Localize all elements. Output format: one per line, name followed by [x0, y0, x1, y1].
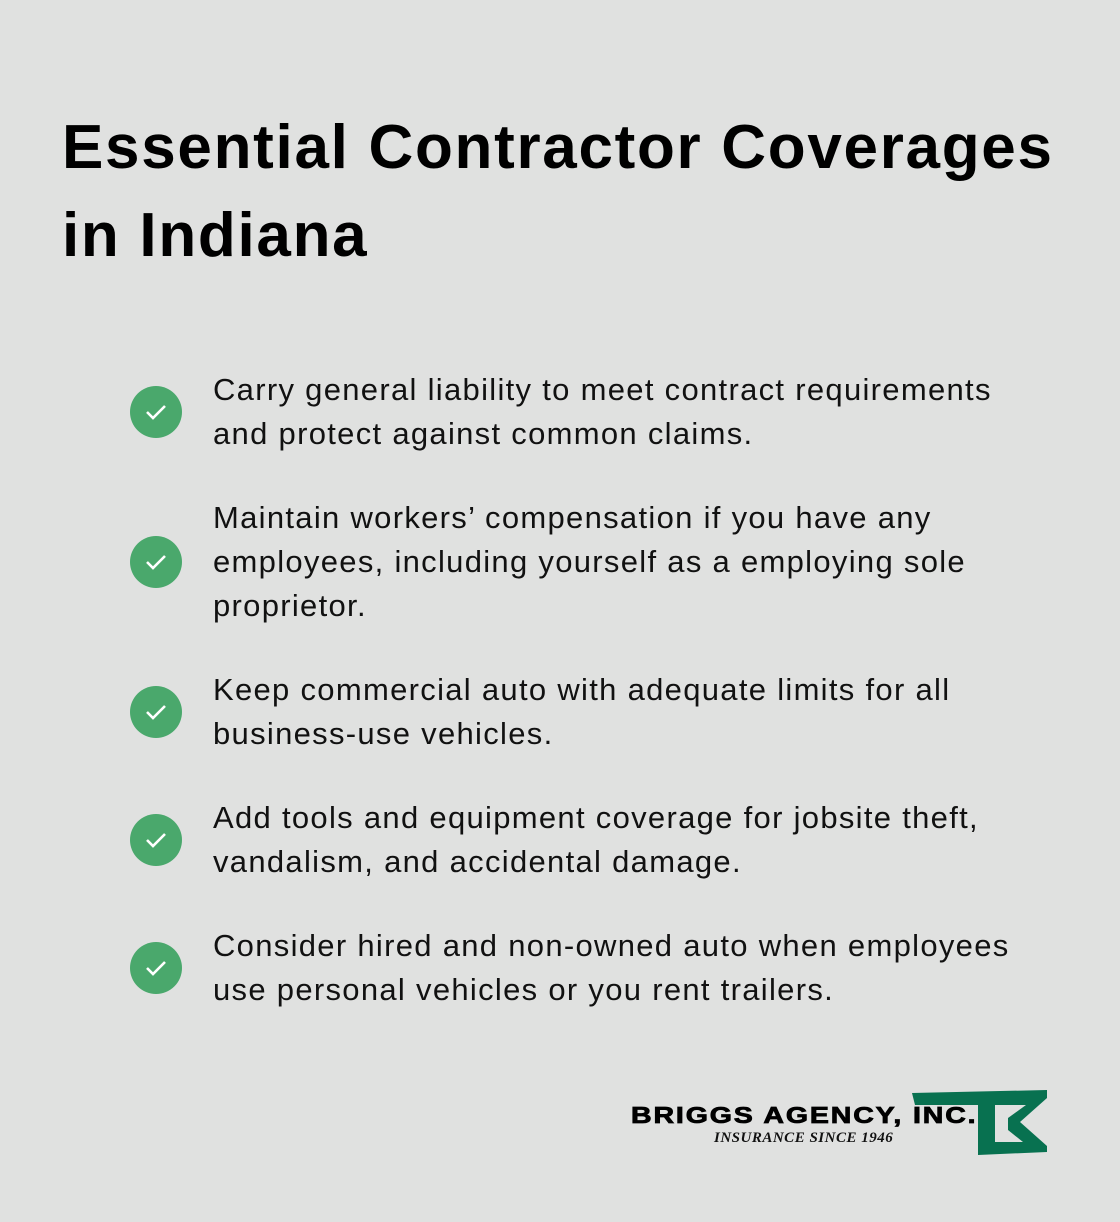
text 4: Add tools and equipment coverage for jobsite theft, [213, 800, 979, 835]
logo mark [912, 1090, 1047, 1155]
icon: check [130, 686, 182, 738]
text 5: Consider hired and non-owned auto when employees [213, 928, 1010, 963]
item 2 [130, 500, 966, 623]
item 3 [130, 672, 950, 751]
logo [631, 1090, 1047, 1155]
logo text: BRIGGS AGENCY, INC. [631, 1102, 977, 1128]
icon: check [130, 536, 182, 588]
icon: check [130, 386, 182, 438]
text 1: Carry general liability to meet contract requirements [213, 372, 992, 407]
title [62, 113, 1054, 270]
item 4 [130, 800, 979, 879]
text 5 [213, 928, 1010, 1007]
item 5 [130, 928, 1010, 1007]
text 1: and protect against common claims. [213, 416, 753, 451]
text 2: proprietor. [213, 588, 367, 623]
text 3: business-use vehicles. [213, 716, 553, 751]
title: Essential Contractor Coverages [62, 113, 1054, 182]
logo tagline: INSURANCE SINCE 1946 [714, 1130, 893, 1146]
text 3 [213, 672, 950, 751]
text 2: employees, including yourself as a employing sole [213, 544, 966, 579]
text 5: use personal vehicles or you rent trailers. [213, 972, 834, 1007]
title: in Indiana [62, 201, 368, 270]
text 4: vandalism, and accidental damage. [213, 844, 742, 879]
icon: check [130, 814, 182, 866]
icon: check [130, 942, 182, 994]
item 1 [130, 372, 992, 451]
text 3: Keep commercial auto with adequate limits for all [213, 672, 950, 707]
text 2: Maintain workers’ compensation if you have any [213, 500, 932, 535]
text 1 [213, 372, 992, 451]
text 4 [213, 800, 979, 879]
text 2 [213, 500, 966, 623]
